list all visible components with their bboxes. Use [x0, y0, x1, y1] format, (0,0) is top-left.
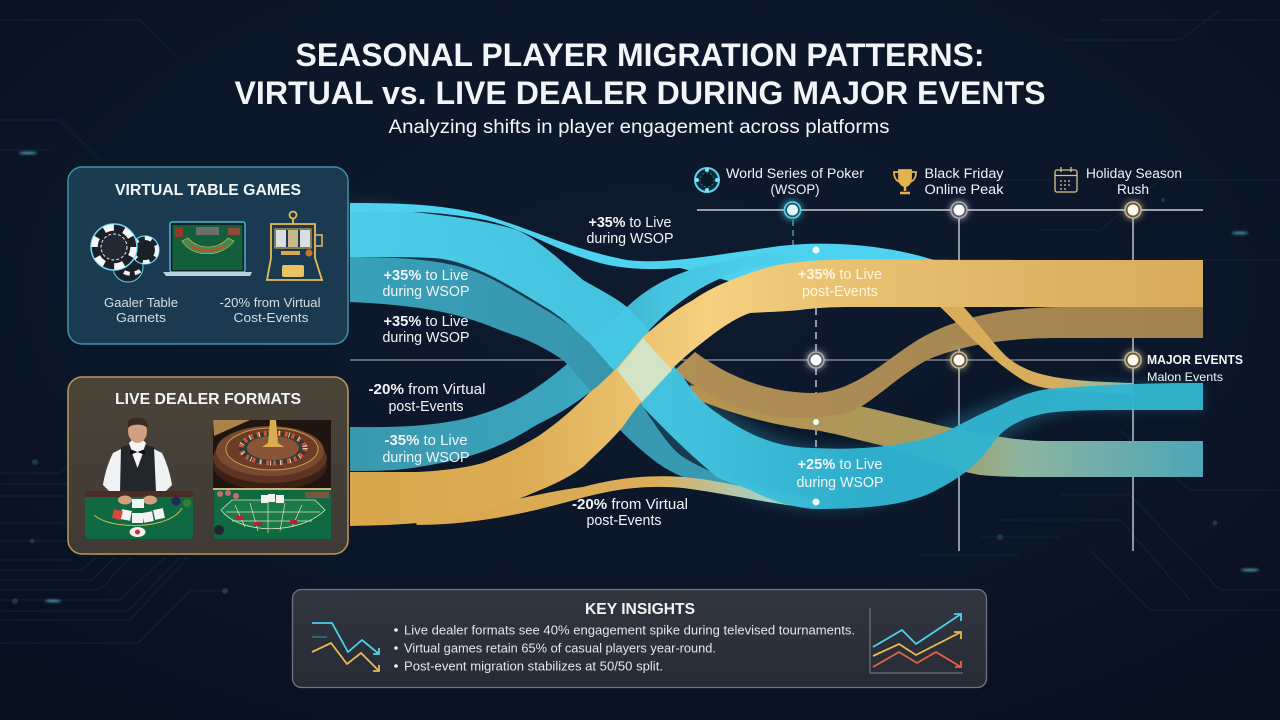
flow: bright cyan main — [350, 203, 1203, 509]
icon: calendar — [1055, 167, 1077, 192]
flow label 2: +35% to Live — [384, 268, 468, 284]
axis label: major events: Malon Events — [1147, 370, 1223, 384]
flow label 4 — [368, 382, 486, 415]
panel: key insights — [292, 590, 986, 688]
bullet 1: Live dealer formats see 40% engagement spike during televised tournaments. — [404, 622, 855, 638]
node: Black Friday — [951, 202, 967, 218]
event label: WSOP: World Series of Poker — [726, 166, 865, 181]
event label: Holiday Season: Holiday Season — [1086, 166, 1182, 181]
event label: Holiday Season: Rush — [1117, 182, 1149, 197]
event label: WSOP — [695, 166, 865, 197]
flow label 8 — [796, 457, 884, 491]
axis label: major events — [1147, 353, 1243, 384]
sublabel: left: Garnets — [116, 310, 167, 325]
flow label 5 — [382, 433, 470, 466]
flow: gold main band — [350, 259, 1203, 526]
flow label 1 — [586, 215, 674, 247]
flow label 6 — [572, 497, 688, 529]
bullet 3: Post-event migration stabilizes at 50/50 split. — [404, 658, 663, 674]
node: mid centre — [951, 352, 967, 368]
event label: Black Friday: Online Peak — [924, 182, 1004, 197]
node: WSOP — [784, 202, 800, 218]
crossing highlight — [617, 338, 672, 402]
axis label: major events: MAJOR EVENTS — [1147, 353, 1243, 367]
sublabel: right — [220, 295, 321, 325]
flow label 4: -20% from Virtual — [368, 382, 486, 398]
bullet 2: Virtual games retain 65% of casual players year-round. — [404, 640, 716, 656]
flow label 6: -20% from Virtual — [572, 497, 688, 513]
flow label 5: -35% to Live — [384, 433, 468, 449]
flow label 7 — [798, 267, 882, 300]
flow: gold lower thin strand — [413, 476, 816, 525]
event label: WSOP: (WSOP) — [770, 182, 820, 197]
chart: rising trends — [870, 608, 963, 673]
icon: laptop with table — [163, 222, 252, 276]
event label: Holiday Season — [1055, 166, 1182, 197]
heading: KEY INSIGHTS — [585, 601, 695, 618]
heading: LIVE DEALER FORMATS — [115, 391, 301, 408]
illustration: roulette wheel — [213, 420, 331, 490]
illustration: roulette table — [214, 490, 331, 539]
flow: thin cyan to WSOP — [350, 203, 940, 300]
flow: teal falling from virtual panel — [350, 257, 816, 505]
sublabel: left: Gaaler Table — [104, 295, 178, 310]
panel: live dealer formats — [68, 377, 348, 554]
sublabel: left — [104, 295, 178, 325]
flow: teal rising from live panel — [350, 247, 810, 471]
icon: poker chips — [91, 224, 159, 282]
flow label 3 — [382, 314, 470, 346]
flow: gold lower band to teal end — [690, 385, 1203, 477]
flow label 1: during WSOP — [586, 231, 674, 247]
flow label 3: during WSOP — [382, 330, 470, 346]
flow label 8: +25% to Live — [798, 457, 882, 473]
node: Holiday Season — [1125, 202, 1141, 218]
flow label 1: +35% to Live — [588, 215, 672, 231]
node: major events — [1125, 352, 1141, 368]
icon: trophy — [894, 170, 916, 193]
flow label 7: post-Events — [802, 284, 878, 300]
sublabel: right: -20% from Virtual — [220, 295, 321, 310]
title — [234, 37, 1046, 111]
flow label 5: during WSOP — [382, 450, 470, 466]
title: VIRTUAL vs. LIVE DEALER DURING MAJOR EVENTS — [234, 75, 1046, 111]
flow label 2: during WSOP — [382, 284, 470, 300]
chart: falling trends — [312, 623, 379, 671]
timeline grid lines — [350, 210, 1203, 551]
node: mid left — [808, 352, 824, 368]
panel: virtual table games — [68, 167, 348, 344]
icon: slot machine — [267, 212, 322, 280]
flow glow — [350, 203, 1203, 510]
flow: gold branch to major events — [938, 305, 1133, 394]
heading: VIRTUAL TABLE GAMES — [115, 182, 301, 199]
icon: poker chip — [695, 168, 719, 192]
illustration: dealer at table — [85, 418, 193, 539]
flow label 8: during WSOP — [796, 475, 884, 491]
event label: Black Friday: Black Friday — [924, 166, 1004, 181]
flow label 2 — [382, 268, 470, 300]
title: SEASONAL PLAYER MIGRATION PATTERNS: — [296, 37, 984, 73]
flow label 6: post-Events — [586, 513, 662, 529]
event label: Black Friday — [894, 166, 1004, 197]
flow: gold rising band — [675, 307, 1203, 418]
flow label 7: +35% to Live — [798, 267, 882, 283]
sublabel: right: Cost-Events — [234, 310, 309, 325]
flow label 4: post-Events — [388, 399, 464, 415]
flow label 3: +35% to Live — [384, 314, 468, 330]
subtitle: Analyzing shifts in player engagement across platforms — [388, 117, 890, 138]
timeline nodes — [782, 200, 1142, 506]
